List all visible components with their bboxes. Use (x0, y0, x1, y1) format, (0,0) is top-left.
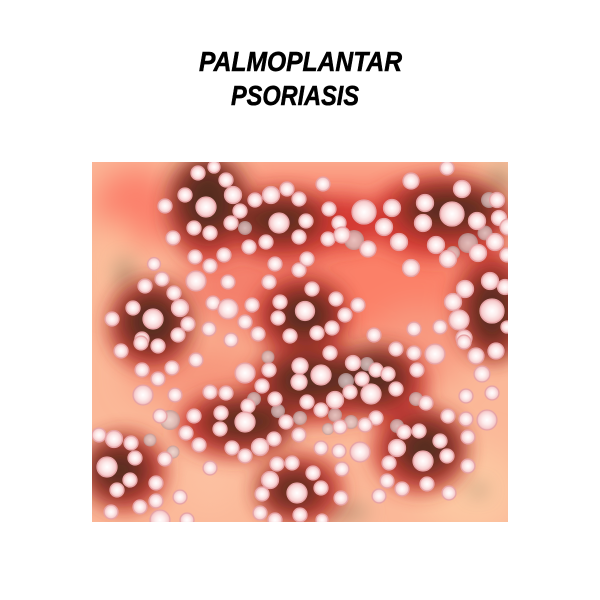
red inflammation halos (85, 158, 528, 524)
skin background (92, 162, 508, 522)
inflamed coral patches (93, 157, 520, 535)
pustules: upper right (296, 161, 516, 346)
title (199, 46, 403, 111)
title: PSORIASIS (231, 80, 359, 111)
title: PALMOPLANTAR (199, 46, 403, 77)
dim pustules beneath the surface (144, 192, 497, 458)
panel: skin illustration (92, 162, 508, 522)
pustules: upper left (105, 161, 306, 347)
pustules: lower right (300, 335, 504, 526)
muted olive shadows (115, 166, 512, 520)
pustules: lower left (92, 336, 308, 530)
dark lesion cores (90, 160, 516, 510)
